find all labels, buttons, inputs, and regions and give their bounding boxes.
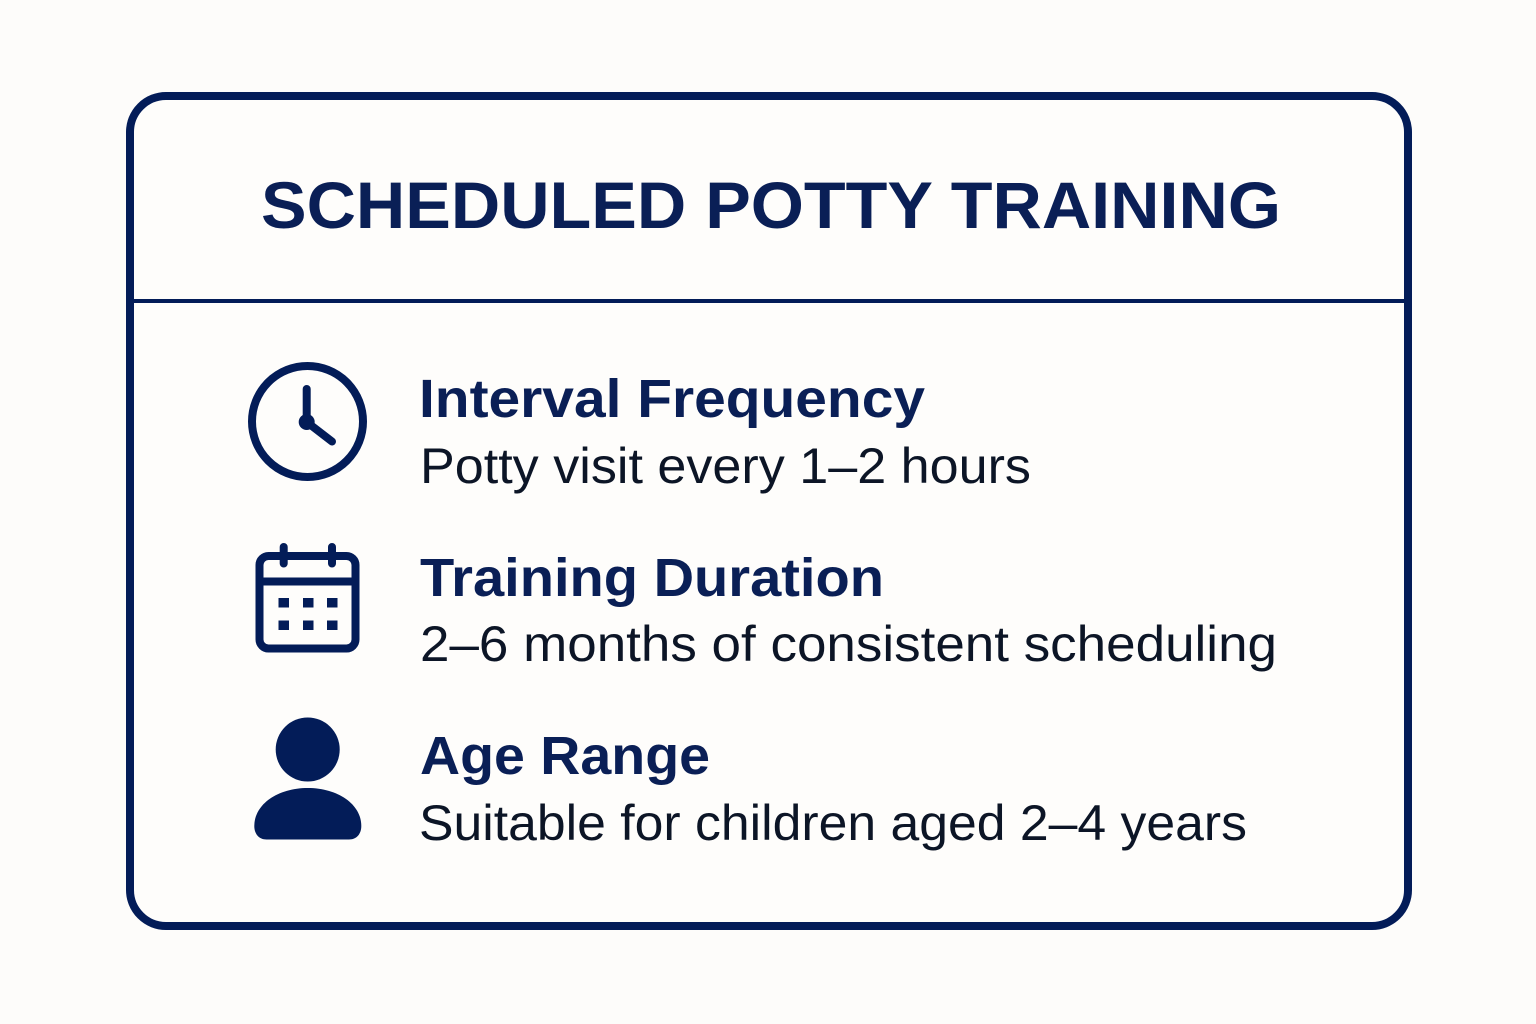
text: duration detail: 2–6 months of consistent scheduling xyxy=(420,616,1277,672)
heading: training duration: Training Duration xyxy=(420,548,884,608)
icon: person xyxy=(254,718,361,840)
title: SCHEDULED POTTY TRAINING xyxy=(261,168,1281,242)
panel: card xyxy=(130,96,1408,926)
text: age detail: Suitable for children aged 2–4 years xyxy=(419,795,1247,851)
icon: clock xyxy=(252,366,363,477)
heading: age range: Age Range xyxy=(420,726,710,786)
text: interval detail: Potty visit every 1–2 hours xyxy=(420,438,1031,494)
heading: interval frequency: Interval Frequency xyxy=(419,369,925,429)
icon: calendar xyxy=(260,547,356,648)
